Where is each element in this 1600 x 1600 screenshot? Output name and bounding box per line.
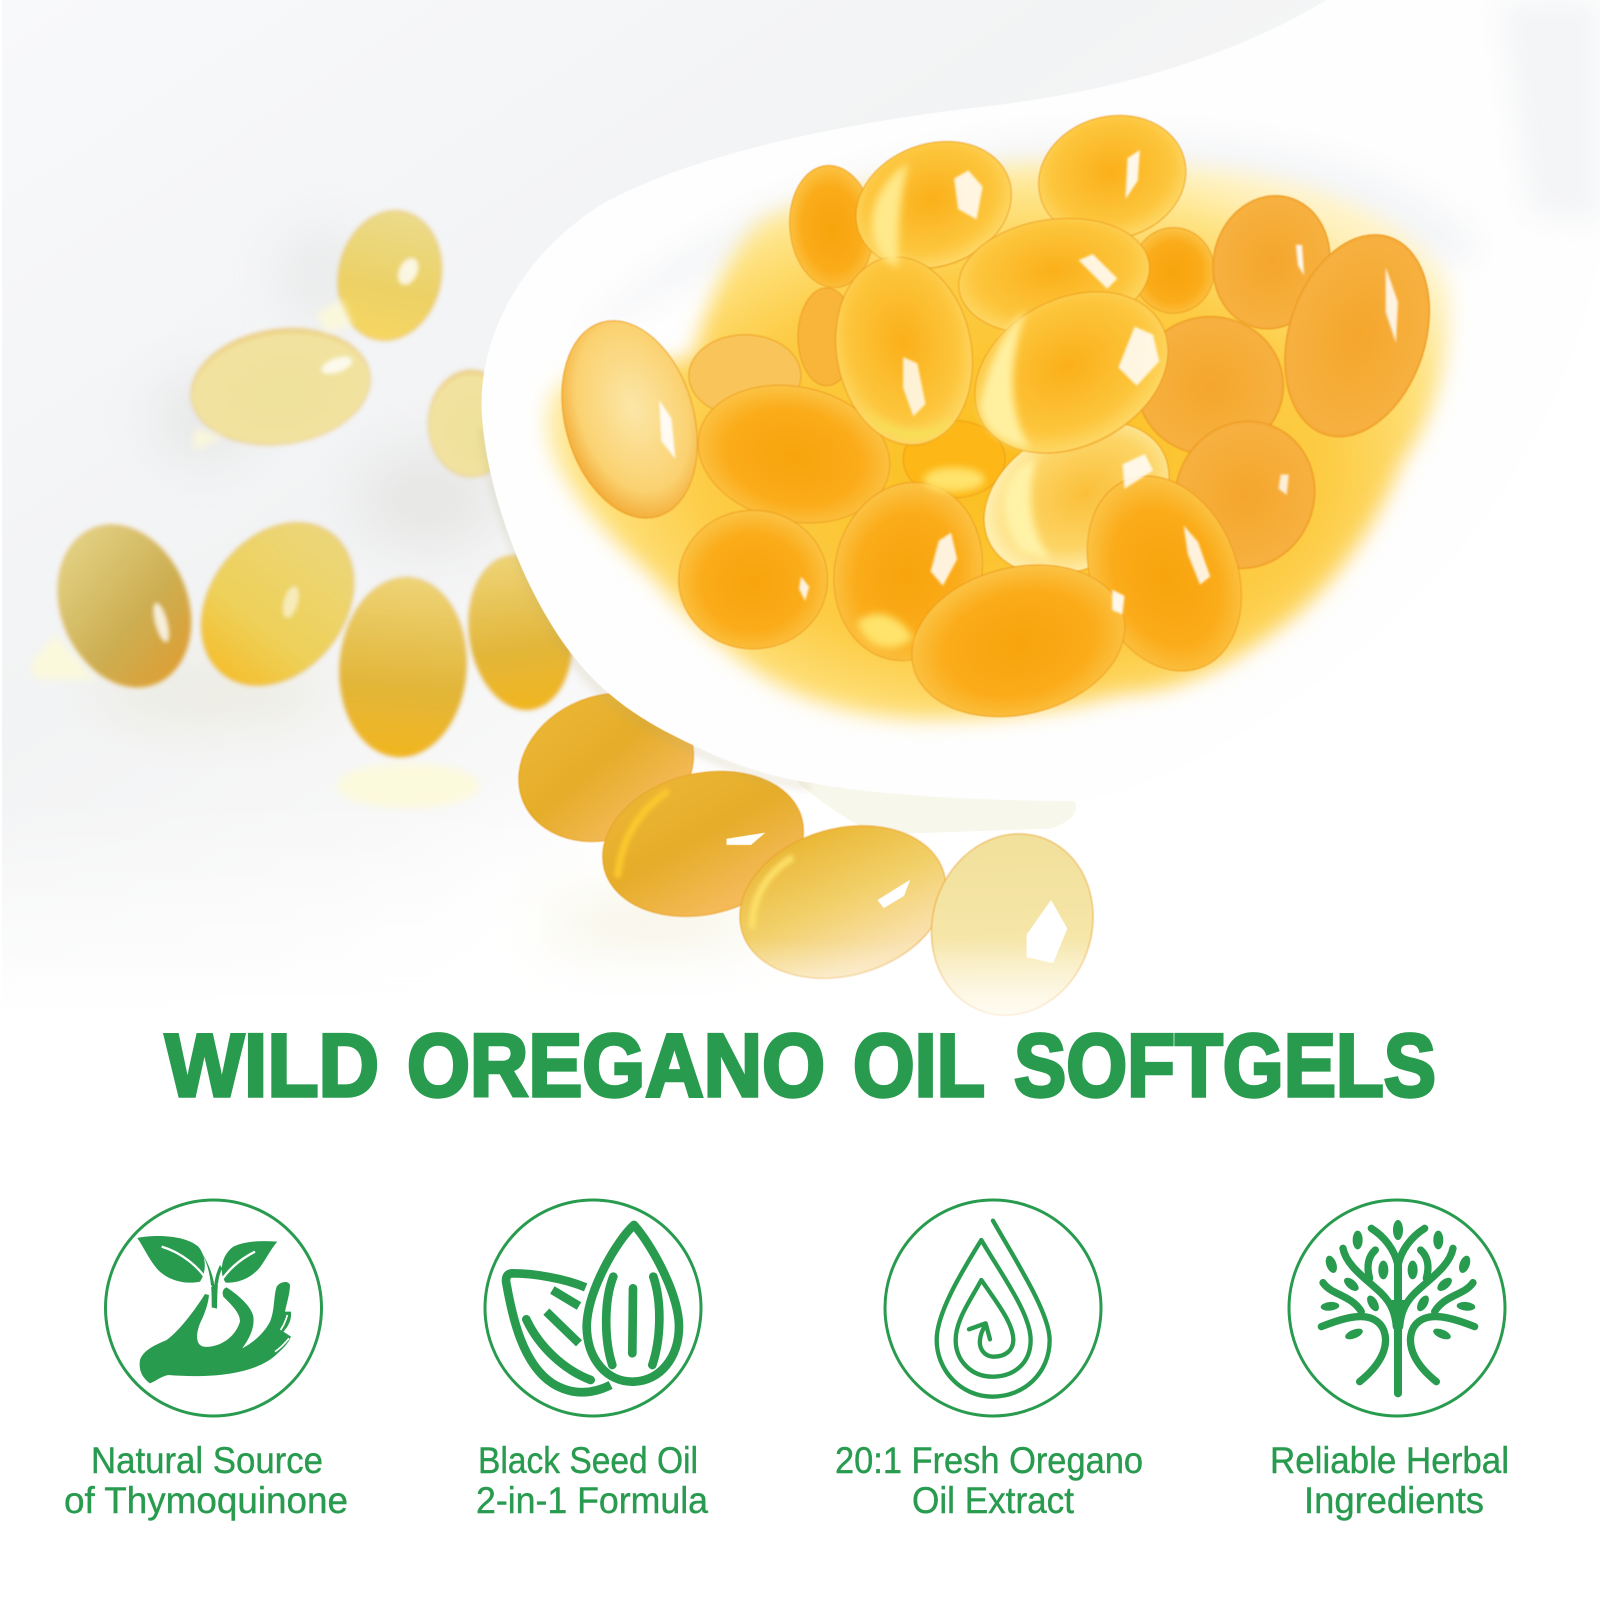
softgel	[326, 201, 453, 350]
softgel	[170, 493, 385, 715]
soft background fade	[0, 796, 1600, 1054]
oil pool in bowl	[547, 160, 1450, 719]
softgel	[957, 391, 1196, 605]
title: SOFTGELS	[1014, 1015, 1436, 1115]
softgel front-left	[540, 305, 719, 534]
label: Oil Extract	[912, 1480, 1075, 1521]
softgels under the spoon	[496, 667, 1116, 1036]
softgel	[838, 120, 1029, 290]
icon: almond seeds	[506, 1225, 679, 1392]
softgel	[679, 510, 828, 649]
photo: softgels and white spoon	[0, 0, 1600, 1084]
photo background	[2, 0, 1600, 1053]
specular highlights	[659, 150, 1398, 614]
softgel	[908, 813, 1116, 1036]
back softgel	[1133, 228, 1214, 313]
shadow at spoon edge	[484, 429, 810, 787]
title	[165, 1015, 1436, 1115]
label: 20:1 Fresh Oregano	[835, 1440, 1143, 1481]
title: OREGANO	[407, 1015, 825, 1115]
icon circle	[1289, 1200, 1505, 1416]
spoon	[482, 0, 1600, 801]
under-spoon highlights	[727, 833, 1067, 963]
label: Black Seed Oil	[478, 1440, 698, 1481]
label	[1270, 1440, 1509, 1521]
right handle edge shading	[1500, 0, 1600, 224]
soft shadows on table	[92, 230, 765, 954]
softgel	[947, 260, 1196, 485]
softgels in bowl	[540, 99, 1454, 738]
softgel	[1024, 99, 1200, 256]
softgel	[903, 420, 1005, 498]
feature: natural source of thymoquinone	[64, 1200, 348, 1521]
back softgel	[689, 335, 801, 416]
softgel	[821, 246, 987, 456]
softgel	[334, 573, 472, 761]
title: OIL	[853, 1015, 985, 1115]
feature: black seed oil	[476, 1200, 708, 1521]
label	[64, 1440, 348, 1521]
label	[476, 1440, 708, 1521]
softgel	[1137, 316, 1284, 455]
softgel	[459, 549, 582, 717]
label: 2-in-1 Formula	[476, 1480, 708, 1521]
feature: fresh oregano extract	[835, 1200, 1143, 1521]
feature: reliable herbal ingredients	[1270, 1200, 1509, 1521]
oil caustics on table	[31, 299, 480, 808]
softgel	[496, 667, 716, 867]
label: Natural Source	[91, 1440, 323, 1481]
softgel	[184, 318, 377, 456]
icon: spiral oil drop	[937, 1221, 1050, 1397]
label	[835, 1440, 1143, 1521]
bright edges	[617, 791, 793, 929]
spoon foot	[796, 781, 1076, 835]
icon: hand holding sprout	[137, 1236, 291, 1383]
left softgel highlights	[150, 255, 423, 644]
icon circle	[106, 1200, 322, 1416]
bright refractions	[857, 163, 1051, 648]
softgel	[722, 802, 964, 1002]
out-of-focus softgels on the left	[34, 201, 582, 761]
icon: tree	[1320, 1220, 1476, 1393]
icon circle	[885, 1200, 1101, 1416]
spoon inner wall shading	[571, 134, 1480, 347]
softgel	[1059, 453, 1269, 694]
softgel	[34, 505, 214, 707]
softgel	[1153, 400, 1337, 590]
title: WILD	[165, 1015, 379, 1115]
softgel	[587, 751, 819, 937]
softgel	[685, 368, 903, 540]
softgel	[951, 207, 1157, 346]
back softgel	[798, 288, 855, 386]
back softgel	[785, 162, 879, 291]
softgel	[896, 543, 1141, 738]
label: Reliable Herbal	[1270, 1440, 1509, 1481]
fade of softgels into white	[0, 939, 1600, 1053]
label: of Thymoquinone	[64, 1480, 348, 1521]
label: Ingredients	[1304, 1480, 1484, 1521]
softgel	[818, 468, 999, 675]
softgel	[1260, 216, 1454, 456]
icon circle	[485, 1200, 701, 1416]
softgel	[1199, 183, 1344, 342]
softgel	[429, 370, 514, 477]
